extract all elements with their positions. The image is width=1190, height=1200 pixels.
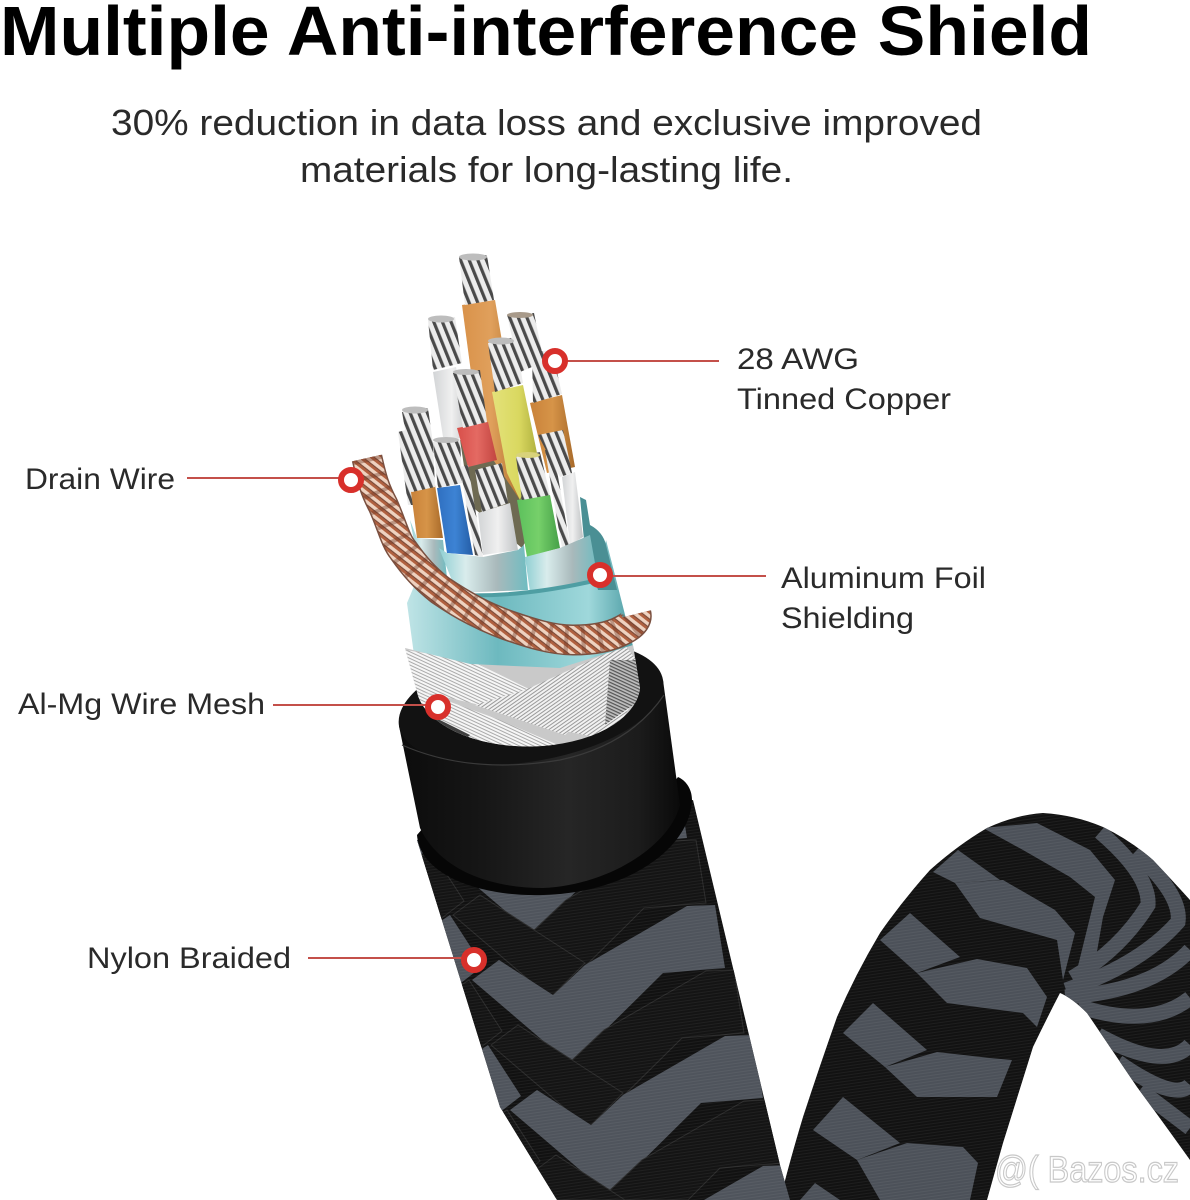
leader and marker: 28 AWG Tinned Copper [545,351,719,371]
black inner jacket with collar [389,623,692,895]
drain wire: twisted copper strands [367,458,636,640]
conductors: insulated tinned copper wires [398,254,583,557]
silver Al-Mg wire mesh [405,645,640,746]
label: Aluminum Foil Shielding: Shielding [781,602,914,635]
back foil ring [580,497,617,590]
label: Nylon Braided: Nylon Braided [87,942,291,975]
leader and marker: Nylon Braided [308,950,484,970]
label: 28 AWG Tinned Copper [737,343,951,416]
leader and marker: Aluminum Foil Shielding [590,565,766,585]
label: 28 AWG Tinned Copper: Tinned Copper [737,383,951,416]
leader and marker: Drain Wire [187,470,361,490]
leader and marker: Al-Mg Wire Mesh [273,697,448,717]
subtitle [111,102,982,190]
subtitle: materials for long-lasting life. [300,149,793,190]
label: Aluminum Foil Shielding: Aluminum Foil [781,562,986,595]
subtitle: 30% reduction in data loss and exclusive improved [111,102,982,143]
main cable: nylon braid chevrons [417,800,790,1200]
label: Aluminum Foil Shielding [781,562,986,635]
second cable loop: nylon braid arc [770,800,1190,1200]
label: Drain Wire: Drain Wire [25,463,175,496]
label: 28 AWG Tinned Copper: 28 AWG [737,343,859,376]
label: Al-Mg Wire Mesh: Al-Mg Wire Mesh [18,688,265,721]
aluminum foil cups [410,520,598,595]
foil sheath [407,540,634,671]
